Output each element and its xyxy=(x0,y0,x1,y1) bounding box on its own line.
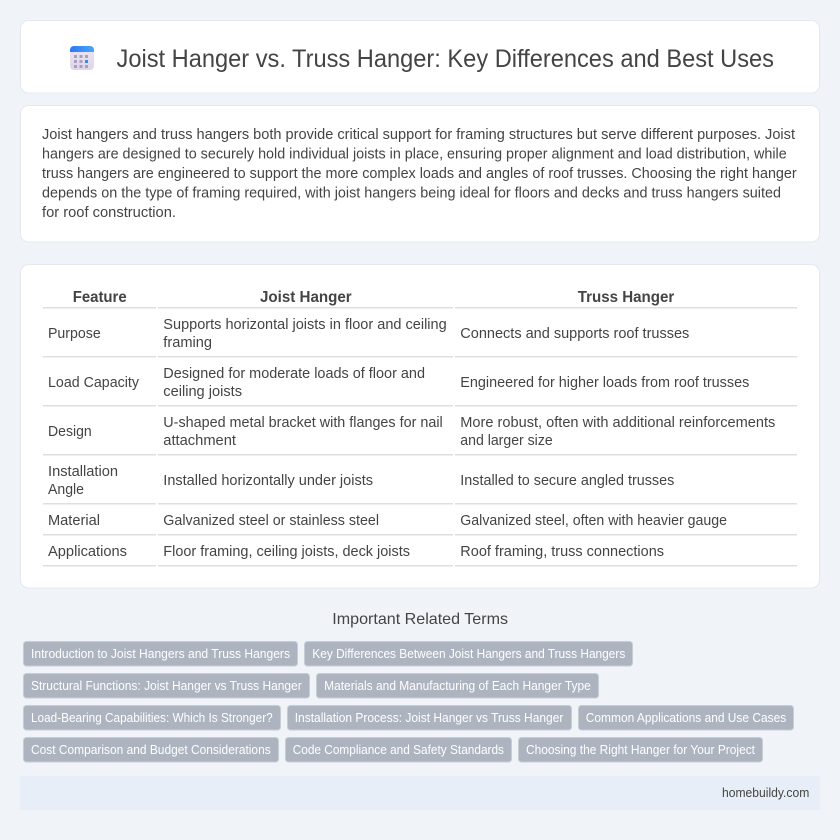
footer site name: homebuildy.com xyxy=(722,786,809,800)
row: Material: Material xyxy=(48,512,100,529)
intro paragraph: truss hangers are engineered to support the more complex loads and angles of roof trusses. Choosing the right hanger xyxy=(42,165,797,182)
row: Applications xyxy=(48,543,664,560)
row: Installation Angle: Installed horizontally under joists xyxy=(163,472,373,489)
tag xyxy=(24,738,278,762)
row: Material xyxy=(48,512,727,529)
tag: Key Differences Between Joist Hangers and Truss Hangers xyxy=(312,647,625,661)
row: Load Capacity: Engineered for higher loads from roof trusses xyxy=(460,374,749,391)
row: Material: Galvanized steel, often with heavier gauge xyxy=(460,512,727,529)
row: Design: U-shaped metal bracket with flanges for nail xyxy=(163,414,443,431)
tag: Materials and Manufacturing of Each Hanger Type xyxy=(324,679,591,693)
row: Purpose: framing xyxy=(163,334,212,351)
intro paragraph xyxy=(42,126,797,221)
row: Purpose: Supports horizontal joists in floor and ceiling xyxy=(163,316,447,333)
row: Load Capacity: Designed for moderate loads of floor and xyxy=(163,365,425,382)
row: Installation Angle: Installation xyxy=(48,463,118,480)
row: Design: and larger size xyxy=(460,432,553,449)
row: Applications: Roof framing, truss connections xyxy=(460,543,664,560)
tag: Choosing the Right Hanger for Your Project xyxy=(526,743,755,757)
related terms heading: Important Related Terms xyxy=(332,611,508,628)
header card xyxy=(20,20,820,93)
intro paragraph: for roof construction. xyxy=(42,204,176,221)
row: Load Capacity: ceiling joists xyxy=(163,383,242,400)
tag: Installation Process: Joist Hanger vs Truss Hanger xyxy=(295,711,563,725)
row: Design xyxy=(48,414,775,449)
row: Design: More robust, often with additional reinforcements xyxy=(460,414,775,431)
related term tags xyxy=(24,642,794,762)
row: Design: attachment xyxy=(163,432,237,449)
table header row xyxy=(73,289,674,306)
row: Installation Angle: Installed to secure angled trusses xyxy=(460,472,674,489)
tag: Code Compliance and Safety Standards xyxy=(293,743,504,757)
tag xyxy=(518,738,762,762)
intro paragraph: Joist hangers and truss hangers both provide critical support for framing structures but serve different purposes. Joist xyxy=(42,126,796,143)
tag: Common Applications and Use Cases xyxy=(586,711,786,725)
row: Material: Galvanized steel or stainless steel xyxy=(163,512,379,529)
tag xyxy=(24,642,298,666)
tag: Introduction to Joist Hangers and Truss Hangers xyxy=(31,647,290,661)
tag: Load-Bearing Capabilities: Which Is Stronger? xyxy=(31,711,273,725)
row: Load Capacity: Load Capacity xyxy=(48,374,139,391)
row: Purpose: Purpose xyxy=(48,325,101,342)
table header row: Joist Hanger xyxy=(260,289,352,306)
tag xyxy=(304,642,632,666)
tag: Cost Comparison and Budget Considerations xyxy=(31,743,271,757)
row: Installation Angle: Angle xyxy=(48,481,84,498)
footer bar xyxy=(20,776,820,810)
tag xyxy=(316,674,598,698)
table header row: Truss Hanger xyxy=(578,289,674,306)
tag xyxy=(578,706,794,730)
row: Applications: Floor framing, ceiling joists, deck joists xyxy=(163,543,410,560)
row: Purpose: Connects and supports roof trusses xyxy=(460,325,689,342)
intro text card xyxy=(20,106,820,242)
row: Load Capacity xyxy=(48,365,749,400)
tag: Structural Functions: Joist Hanger vs Truss Hanger xyxy=(31,679,302,693)
intro paragraph: depends on the type of framing required, with joist hangers being ideal for floors and decks and truss hangers suited xyxy=(42,184,781,202)
row: Installation Angle xyxy=(48,463,674,498)
tag xyxy=(24,674,310,698)
row: Design: Design xyxy=(48,423,92,440)
tag xyxy=(286,738,512,762)
tag xyxy=(288,706,572,730)
row: Purpose xyxy=(48,316,689,351)
comparison table panel xyxy=(20,264,820,588)
icon: calendar xyxy=(70,46,94,70)
row: Applications: Applications xyxy=(48,543,127,560)
tag xyxy=(24,706,280,730)
title: Joist Hanger vs. Truss Hanger: Key Differences and Best Uses xyxy=(116,45,774,73)
intro paragraph: hangers are designed to securely hold individual joists in place, ensuring proper alignment and load distribution, while xyxy=(42,146,787,162)
table header row: Feature xyxy=(73,289,127,306)
